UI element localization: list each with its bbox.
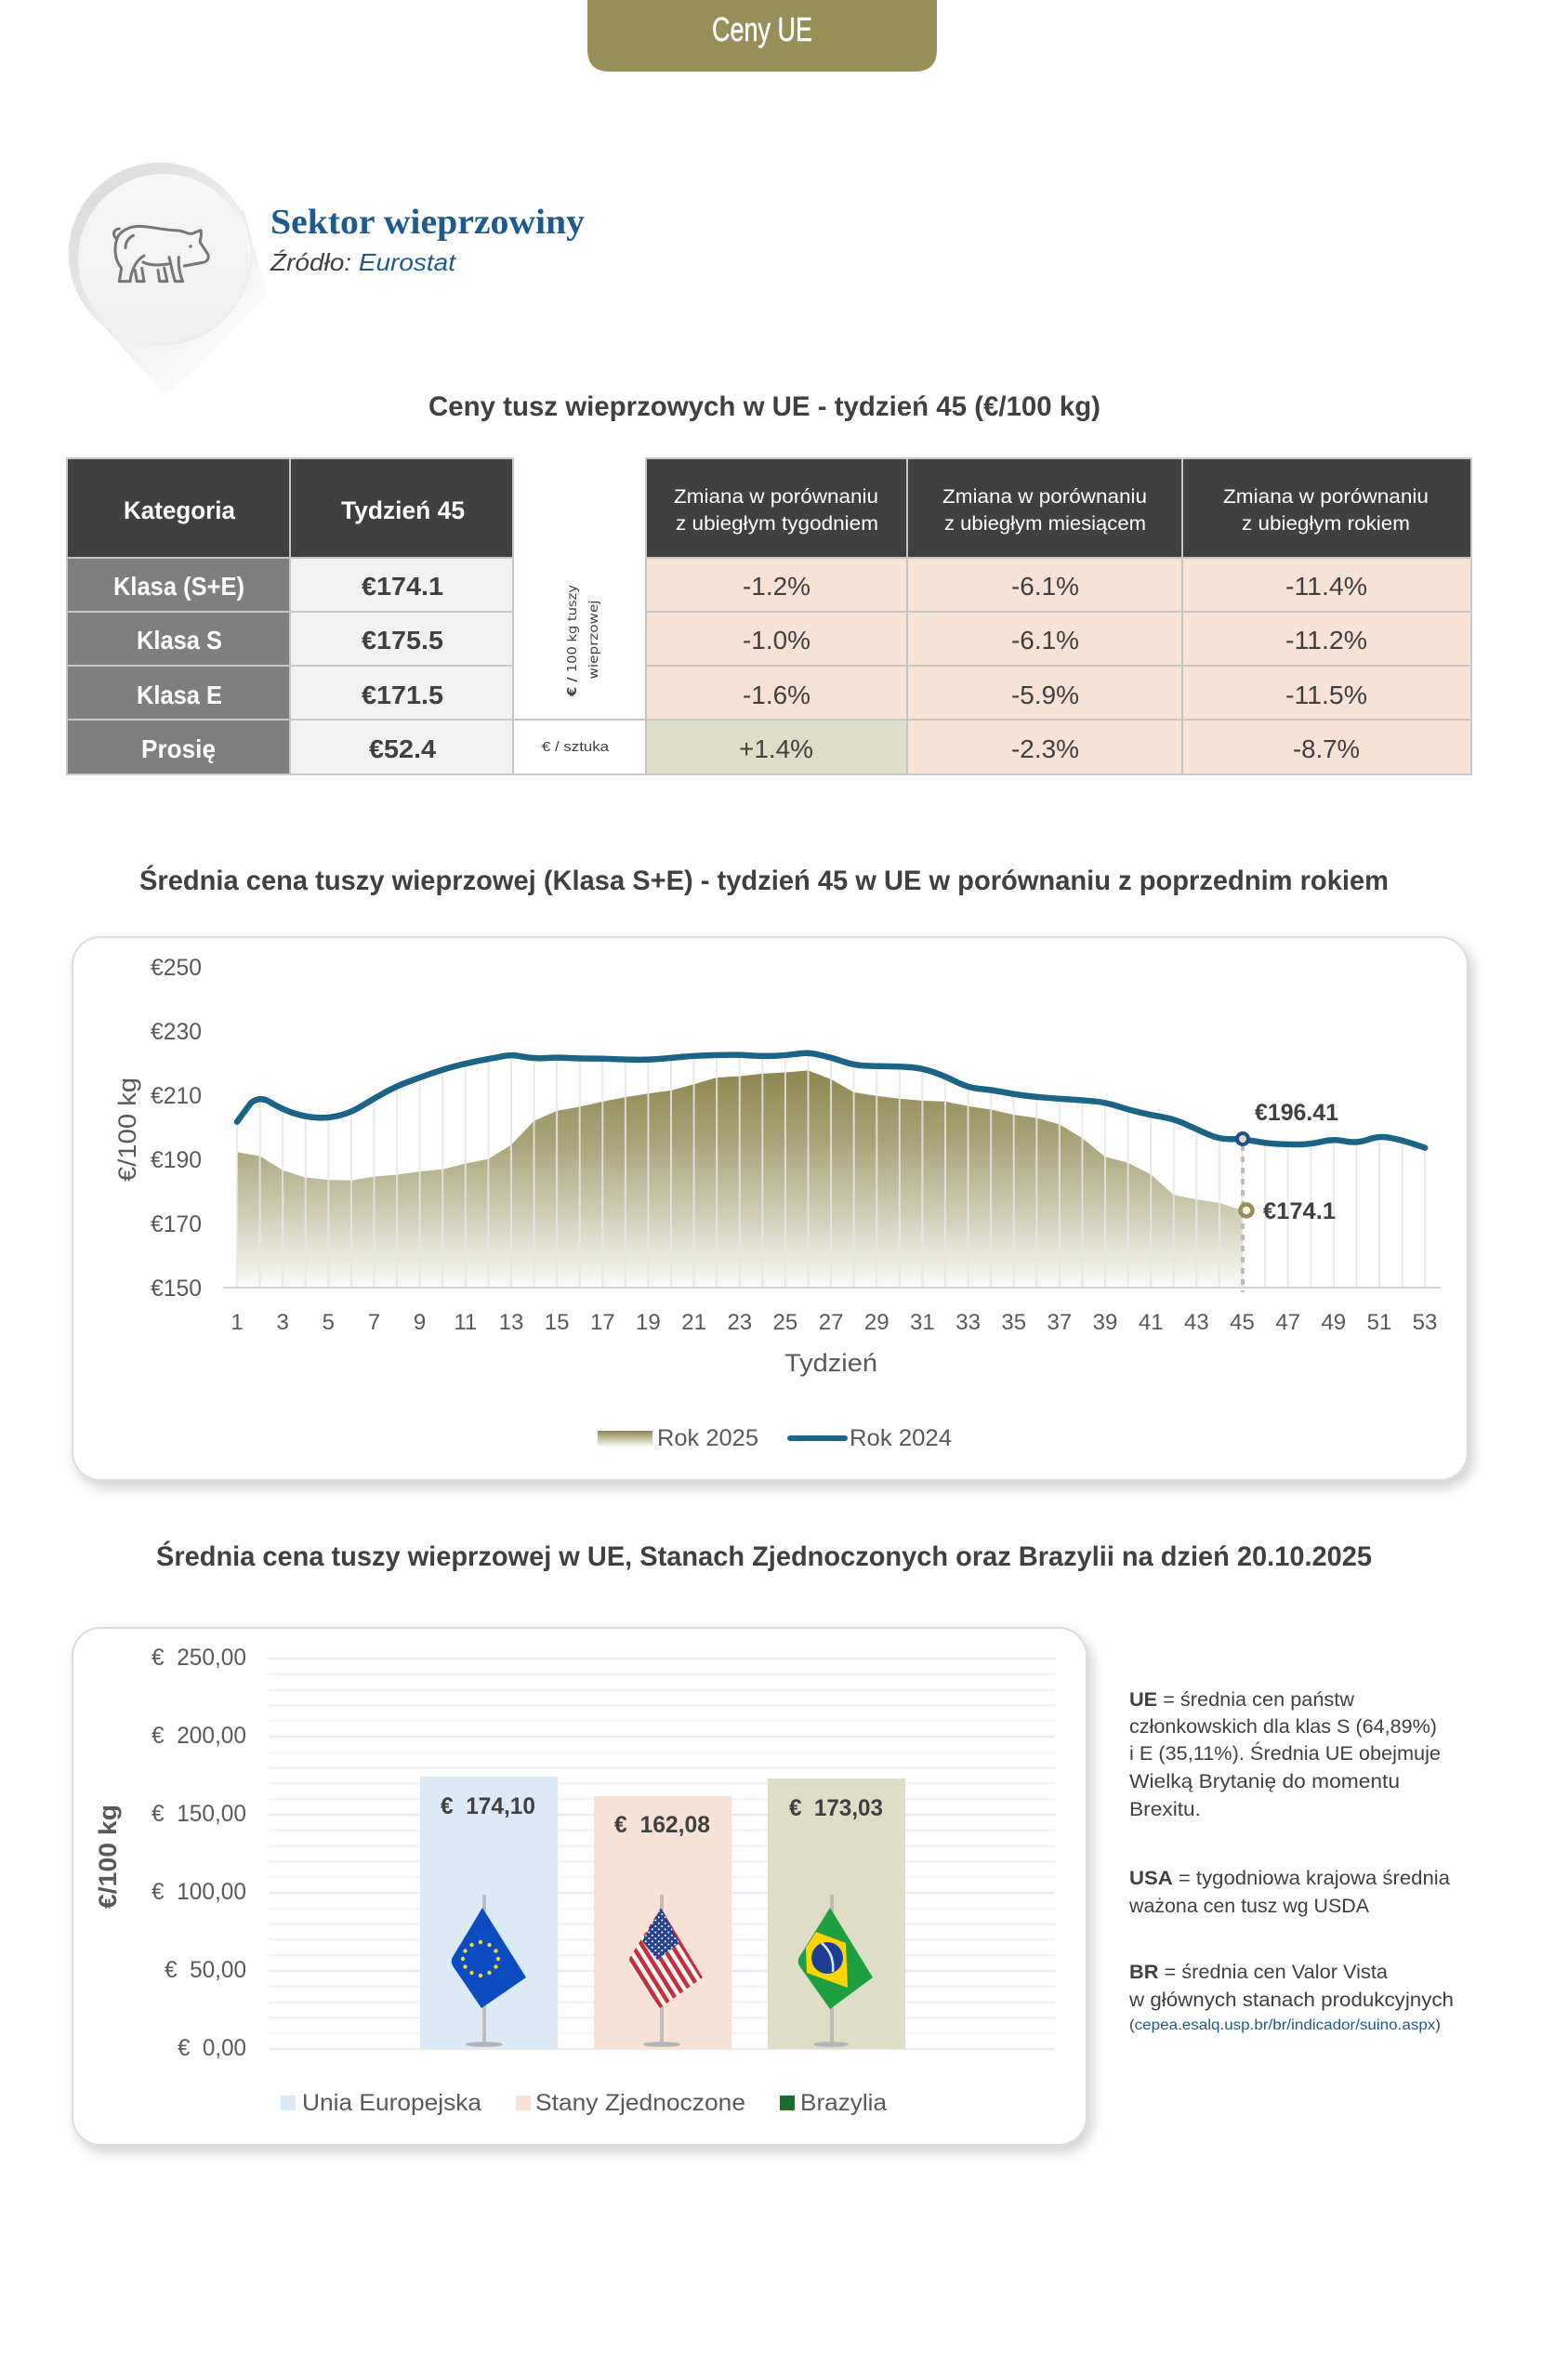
table header text: Kategoria (124, 496, 236, 524)
x axis labels: 45 (1230, 1310, 1255, 1335)
y axis labels (151, 955, 202, 1302)
x axis labels: 15 (545, 1310, 569, 1335)
note: BR: w głównych stanach produkcyjnych (1128, 1990, 1454, 2011)
x axis labels: 47 (1275, 1310, 1300, 1335)
week 45 values: €52.4 (369, 734, 436, 763)
note: UE: UE = średnia cen państw (1129, 1689, 1355, 1711)
table header text: Tydzień 45 (341, 496, 465, 524)
row labels: Prosię (141, 734, 216, 763)
legend (281, 2090, 887, 2116)
banner: Ceny UE: Ceny UE (712, 10, 812, 48)
week 45 dashed marker line (1241, 1145, 1245, 1292)
x axis labels: 7 (368, 1310, 380, 1335)
note: USA: USA = tygodniowa krajowa średnia (1129, 1868, 1450, 1889)
icon: EU flag (452, 1895, 526, 2047)
y axis labels: €150 (151, 1276, 202, 1302)
change values: -5.9% (1011, 681, 1079, 709)
note: BR (1128, 1962, 1454, 2033)
note: UE: członkowskich dla klas S (64,89%) (1129, 1716, 1437, 1738)
data label: 2025: €174.1 (1263, 1198, 1336, 1224)
x axis labels: 33 (955, 1310, 981, 1335)
note: USA: ważona cen tusz wg USDA (1128, 1896, 1369, 1917)
legend (598, 1425, 952, 1451)
bar: Brazil (768, 1778, 905, 2049)
x axis labels: 53 (1413, 1310, 1437, 1335)
x axis labels: 41 (1139, 1310, 1164, 1335)
y axis labels: € 250,00 (152, 1645, 246, 1671)
change values: -11.5% (1285, 681, 1367, 709)
bar: EU: € 174,10 (441, 1793, 535, 1819)
table grid lines (67, 458, 1471, 774)
x axis labels (231, 1310, 1437, 1335)
table cell fills (67, 458, 1471, 774)
change values: -1.0% (743, 626, 810, 654)
unit labels: € / 100 kg tuszy (566, 585, 580, 697)
y axis title: €/100 kg (113, 1078, 141, 1182)
change values: -8.7% (1293, 734, 1360, 763)
note: BR: (cepea.esalq.usp.br/br/indicador/suino.aspx ) (1129, 2017, 1441, 2033)
y axis labels: €250 (151, 955, 202, 981)
table header text: z ubiegłym rokiem (1242, 513, 1410, 535)
note: UE: Wielką Brytanię do momentu (1129, 1771, 1400, 1792)
drop lines (237, 1052, 1425, 1288)
x axis labels: 43 (1184, 1310, 1209, 1335)
banner: Ceny UE (587, 0, 937, 72)
x axis labels: 19 (636, 1310, 661, 1335)
x axis labels: 31 (910, 1310, 935, 1335)
change values: -11.4% (1285, 572, 1367, 601)
y axis labels: €210 (151, 1083, 202, 1109)
x axis labels: 29 (864, 1310, 889, 1335)
note: UE (1129, 1689, 1441, 1820)
row labels: Klasa E (137, 681, 222, 709)
legend: Stany Zjednoczone (535, 2090, 745, 2116)
change values: -1.6% (743, 681, 810, 709)
unit labels (542, 585, 610, 755)
unit labels: wieprzowej (587, 600, 601, 680)
note: UE: i E (35,11%). Średnia UE obejmuje (1129, 1742, 1441, 1765)
change values (739, 572, 1367, 763)
x axis labels: 21 (681, 1310, 706, 1335)
heading: line chart: Średnia cena tuszy wieprzowej (Klasa S+E) - tydzień 45 w UE w porównaniu z poprzednim rokiem (139, 865, 1389, 896)
data label: 2024: €196.41 (1255, 1100, 1338, 1126)
x axis labels: 5 (323, 1310, 335, 1335)
legend: Rok 2024 (850, 1425, 952, 1451)
y axis labels: €170 (151, 1211, 202, 1237)
source line: Źródło: Eurostat (270, 248, 457, 276)
x axis labels: 13 (499, 1310, 523, 1335)
table header text: z ubiegłym miesiącem (944, 513, 1146, 535)
table header text (124, 486, 1429, 535)
row labels: Klasa S (137, 626, 222, 654)
y axis labels: € 150,00 (152, 1801, 246, 1827)
unit labels: € / sztuka (542, 740, 610, 755)
bar: EU (420, 1777, 558, 2049)
marker: 2024 value (1237, 1133, 1248, 1144)
y axis labels: € 50,00 (165, 1957, 246, 1983)
chart card (72, 1628, 1087, 2145)
change values: -2.3% (1011, 734, 1079, 763)
y axis labels: €230 (151, 1019, 202, 1045)
panel: weekly price chart (72, 937, 1468, 1480)
section title: Sektor wieprzowiny: Sektor wieprzowiny (270, 203, 585, 242)
table header text: Zmiana w porównaniu (674, 486, 878, 508)
row labels: Klasa (S+E) (113, 572, 244, 601)
legend: Unia Europejska (302, 2090, 481, 2116)
change values: -1.2% (743, 572, 810, 601)
x axis labels: 11 (454, 1310, 477, 1335)
y axis title: €/100 kg (94, 1805, 122, 1909)
bar: Brazil: € 173,03 (789, 1795, 883, 1821)
x axis labels: 49 (1321, 1310, 1346, 1335)
week 45 values: €175.5 (362, 626, 443, 654)
change values: +1.4% (739, 734, 813, 763)
x axis labels: 35 (1001, 1310, 1026, 1335)
y axis labels: € 200,00 (152, 1723, 246, 1749)
marker: 2025 value (1240, 1205, 1253, 1216)
x axis labels: 23 (727, 1310, 752, 1335)
row labels (113, 572, 244, 763)
note: BR: BR = średnia cen Valor Vista (1129, 1962, 1388, 1983)
legend: Brazylia (800, 2090, 887, 2116)
line: 2024 (237, 1053, 1425, 1148)
week 45 values: €174.1 (362, 572, 443, 601)
y axis labels: € 100,00 (152, 1879, 246, 1905)
heading: bar chart: Średnia cena tuszy wieprzowej w UE, Stanach Zjednoczonych oraz Brazylii na dzień 20.10.2025 (156, 1540, 1372, 1572)
x axis labels: 17 (590, 1310, 615, 1335)
note: UE: Brexitu. (1129, 1799, 1201, 1820)
panel: price table (67, 458, 1471, 774)
icon: US flag (628, 1895, 703, 2047)
week 45 values: €171.5 (362, 681, 443, 709)
change values: -6.1% (1011, 626, 1079, 654)
x axis labels: 1 (231, 1310, 244, 1335)
change values: -6.1% (1011, 572, 1079, 601)
x axis labels: 27 (819, 1310, 843, 1335)
x axis labels: 51 (1367, 1310, 1391, 1335)
week 45 values (362, 572, 443, 763)
x axis line (223, 1287, 1441, 1289)
x axis labels: 3 (277, 1310, 289, 1335)
note: USA (1128, 1868, 1450, 1917)
x axis labels: 9 (414, 1310, 426, 1335)
y axis labels (152, 1645, 246, 2061)
x axis labels: 39 (1093, 1310, 1117, 1335)
table header text: Zmiana w porównaniu (942, 486, 1147, 508)
icon: Brazil flag (798, 1895, 873, 2047)
change values: -11.2% (1285, 626, 1367, 654)
chart card (72, 937, 1468, 1480)
table header text: Zmiana w porównaniu (1223, 486, 1429, 508)
x axis labels: 25 (773, 1310, 797, 1335)
x axis labels: 37 (1048, 1310, 1072, 1335)
area: 2025 (237, 1070, 1243, 1288)
legend: Rok 2025 (657, 1425, 758, 1451)
bar: USA: € 162,08 (614, 1812, 710, 1838)
table header text: z ubiegłym tygodniem (676, 513, 878, 535)
bar: USA (594, 1796, 731, 2049)
panel: country comparison bar chart (72, 1628, 1087, 2145)
x axis title: Tydzień (784, 1349, 877, 1377)
heading: table: Ceny tusz wieprzowych w UE - tydzień 45 (€/100 kg) (428, 391, 1100, 422)
notes: methodology (1128, 1689, 1454, 2033)
y axis labels: € 0,00 (178, 2035, 246, 2061)
icon: pig in disc (69, 163, 268, 395)
y axis labels: €190 (151, 1147, 202, 1173)
